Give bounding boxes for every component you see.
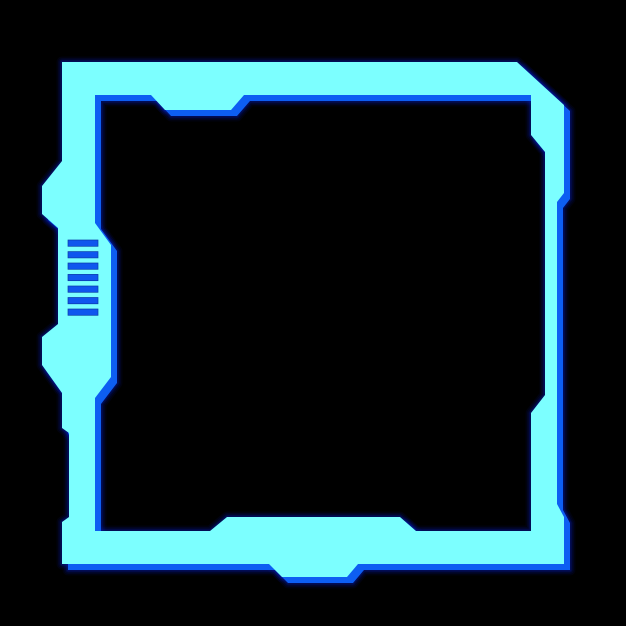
frame: outer glow built from stacked strokes bbox=[42, 62, 570, 583]
frame: cyan face bbox=[42, 62, 564, 577]
vent bars on left side bbox=[68, 240, 98, 315]
frame: blue extruded shadow bbox=[48, 68, 570, 583]
